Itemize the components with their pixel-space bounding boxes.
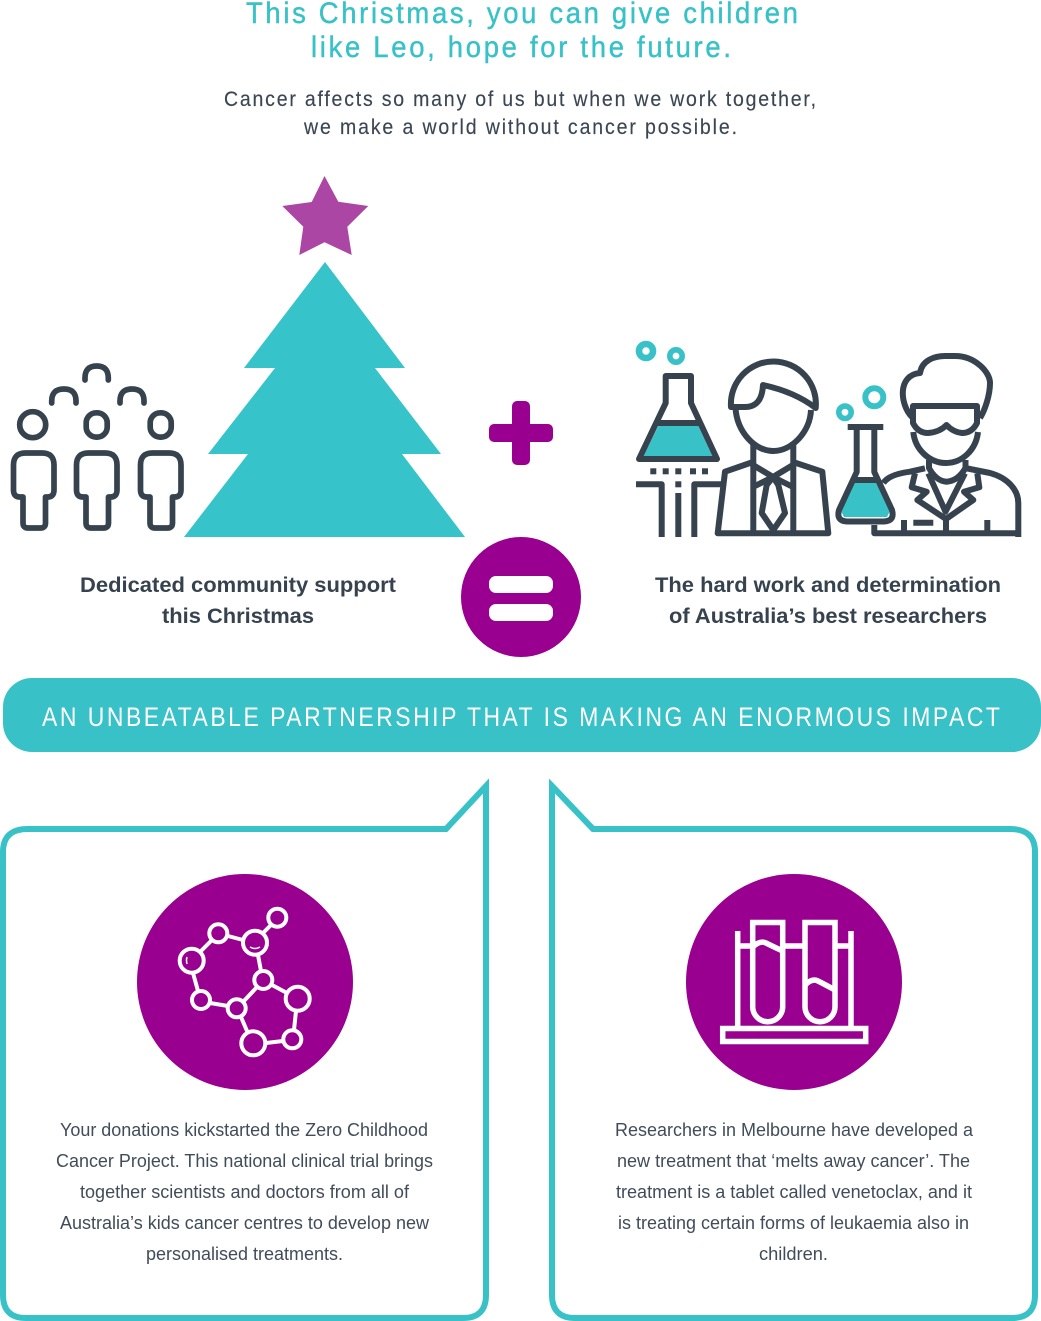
label: community support: Dedicated community support [80, 573, 396, 597]
icon: christmas tree [184, 262, 465, 537]
text: zero childhood project: together scientists and doctors from all of [80, 1182, 410, 1202]
text: zero childhood project [56, 1120, 433, 1264]
label: researchers: of Australia’s best researchers [669, 604, 987, 628]
title: like Leo, hope for the future. [311, 31, 731, 64]
text: zero childhood project: Australia’s kids cancer centres to develop new [60, 1213, 430, 1233]
panel: venetoclax treatment [552, 786, 1035, 1318]
text: venetoclax treatment: treatment is a tablet called venetoclax, and it [616, 1182, 972, 1202]
icon: plus sign [489, 401, 553, 465]
text: venetoclax treatment [615, 1120, 974, 1264]
intro text [224, 88, 816, 139]
icon: researcher with flask [636, 344, 828, 537]
text: zero childhood project: Your donations kickstarted the Zero Childhood [60, 1120, 428, 1140]
title [246, 0, 798, 64]
banner [3, 678, 1041, 752]
icon: scientist with goggles and flask [838, 356, 1018, 537]
label: community support [80, 573, 396, 628]
text: zero childhood project: personalised treatments. [146, 1244, 343, 1264]
intro text: we make a world without cancer possible. [303, 116, 737, 139]
label: researchers: The hard work and determination [655, 573, 1001, 597]
text: zero childhood project: Cancer Project. This national clinical trial brings [56, 1151, 433, 1171]
panel: zero childhood cancer project [3, 786, 486, 1318]
text: venetoclax treatment: children. [759, 1244, 828, 1264]
text: venetoclax treatment: Researchers in Melbourne have developed a [615, 1120, 974, 1140]
icon: test tubes [686, 874, 902, 1090]
icon: molecule [137, 874, 353, 1090]
label: community support: this Christmas [162, 604, 314, 628]
icon: star [282, 176, 368, 255]
intro text: Cancer affects so many of us but when we work together, [224, 88, 816, 111]
text: venetoclax treatment: is treating certain forms of leukaemia also in [618, 1213, 969, 1233]
label: researchers [655, 573, 1001, 628]
text: venetoclax treatment: new treatment that ‘melts away cancer’. The [617, 1151, 970, 1171]
icon: community of people [14, 366, 181, 528]
icon: equals sign [461, 537, 581, 657]
banner: AN UNBEATABLE PARTNERSHIP THAT IS MAKING AN ENORMOUS IMPACT [42, 702, 1000, 732]
